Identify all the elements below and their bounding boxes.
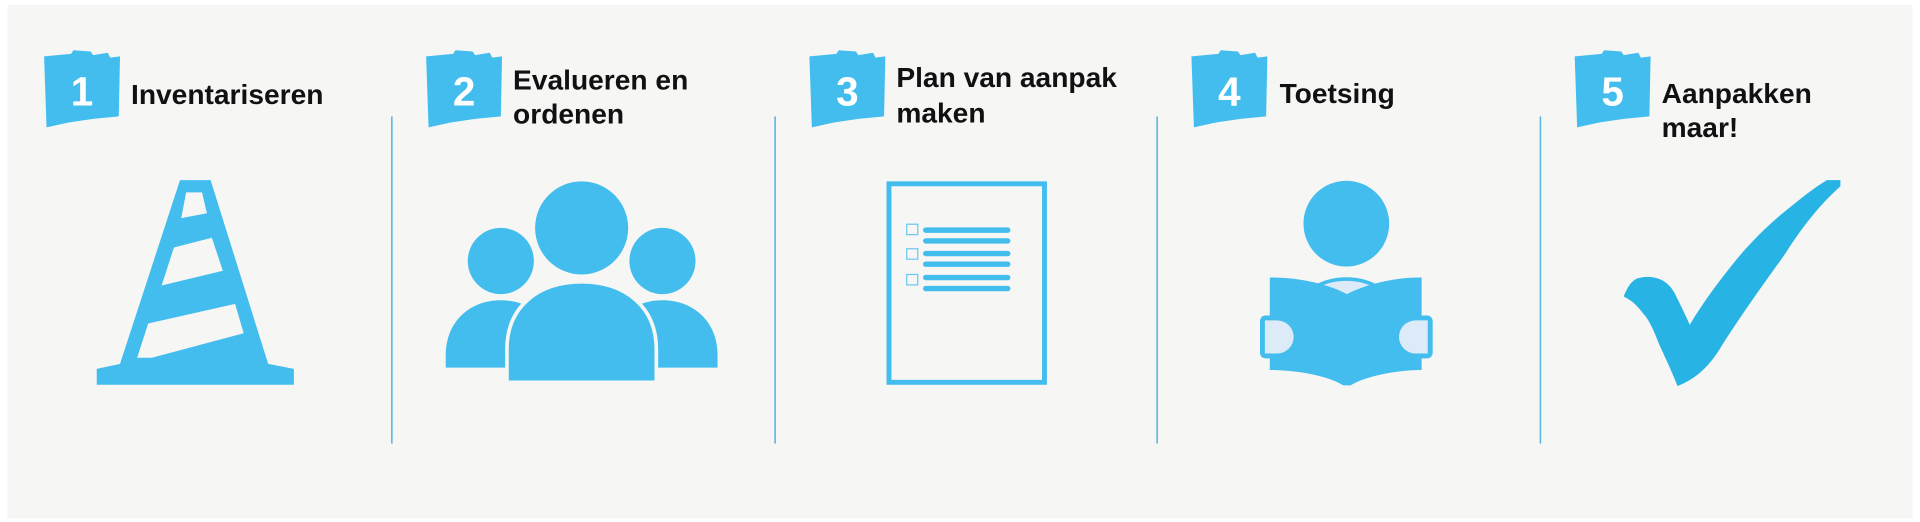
step 3 (809, 50, 1117, 382)
icon: traffic cone (97, 180, 294, 385)
title 3: Plan van aanpak (896, 61, 1117, 93)
badge 3: 3 (836, 68, 859, 114)
title 3: maken (896, 97, 986, 129)
badge 1: 1 (71, 68, 93, 114)
dividers (392, 116, 1540, 444)
title 4: Toetsing (1280, 77, 1395, 109)
title 2: Evalueren en (513, 63, 688, 95)
badge 5: 5 (1601, 68, 1624, 114)
title 1: Inventariseren (131, 78, 323, 110)
badge 5 (1575, 50, 1651, 127)
icon: person reading (1262, 181, 1431, 385)
step 4 (1191, 50, 1431, 385)
badge 4: 4 (1218, 68, 1241, 114)
step 5 (1575, 50, 1840, 386)
badge 3 (809, 50, 885, 127)
icon: checkmark (1624, 180, 1840, 386)
title 5: Aanpakken (1662, 77, 1812, 109)
badge 1 (44, 50, 120, 127)
step 2 (426, 50, 718, 382)
icon: checklist document (889, 184, 1044, 382)
title 2: ordenen (513, 98, 624, 130)
badge 4 (1191, 50, 1267, 127)
step 1 (44, 50, 323, 385)
badge 2: 2 (453, 68, 475, 114)
icon: group of people (446, 181, 718, 382)
title 5: maar! (1662, 111, 1738, 143)
badge 2 (426, 50, 502, 127)
